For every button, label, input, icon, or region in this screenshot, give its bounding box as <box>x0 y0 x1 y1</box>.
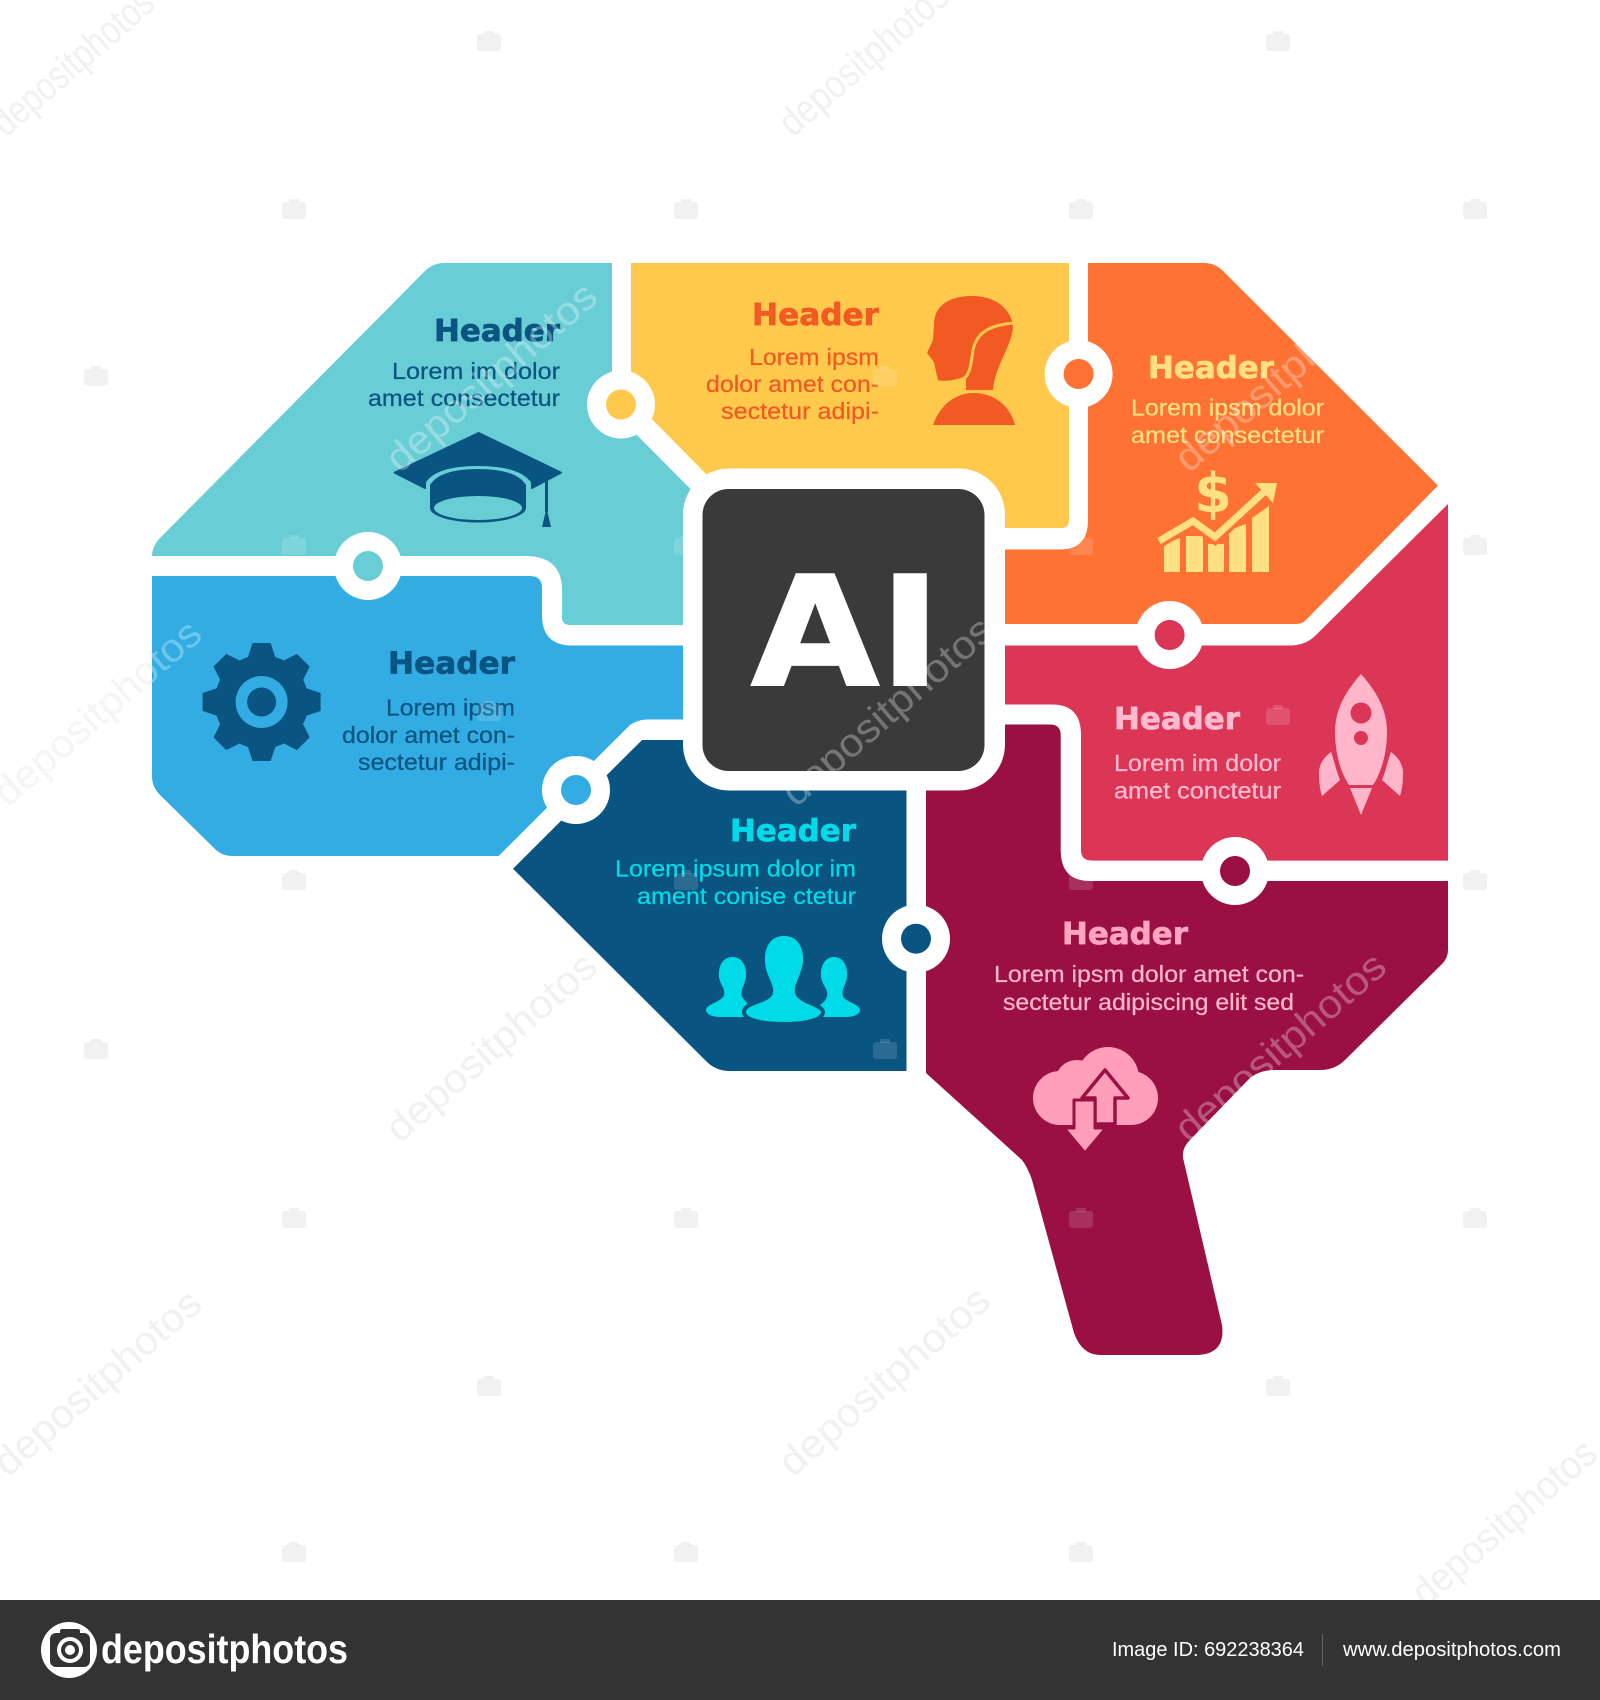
panel: maroon segment: Header <box>1062 917 1188 952</box>
faint camera marks over panels <box>282 366 1290 1228</box>
panel: orange segment: amet consectetur <box>1131 422 1324 448</box>
panel: orange segment <box>990 263 1438 624</box>
panel: yellow segment: sectetur adipi- <box>721 398 879 424</box>
icon: gear <box>203 643 321 761</box>
footer bar: www.depositphotos.com <box>1342 1639 1561 1661</box>
panel: blue segment: dolor amet con- <box>342 722 515 748</box>
central AI chip <box>683 468 1005 790</box>
icon: human head <box>927 296 1015 425</box>
panel: maroon segment: Lorem ipsm dolor amet con- <box>994 961 1304 987</box>
panel: orange segment: Header <box>1148 351 1274 386</box>
background watermarks: depositphotos <box>770 1278 999 1485</box>
panel: yellow segment <box>631 263 1069 528</box>
panel: crimson segment: amet conctetur <box>1114 778 1281 804</box>
foreground watermarks: depositphotos <box>773 608 1002 815</box>
panel: teal segment: Header <box>434 314 560 349</box>
panel: crimson segment: Lorem im dolor <box>1114 750 1281 776</box>
central AI chip: AI <box>751 544 941 721</box>
foreground watermarks: depositphotos <box>1166 944 1395 1151</box>
logo: camera badge <box>41 1622 97 1678</box>
panel: navy segment: Lorem ipsum dolor im <box>615 856 856 882</box>
panel: blue segment: Header <box>388 646 515 682</box>
panel: crimson segment <box>990 504 1448 861</box>
panel: maroon segment <box>926 724 1448 1355</box>
panel: crimson segment: Header <box>1114 702 1240 737</box>
panel: teal segment <box>152 263 700 625</box>
icon: cloud with arrows <box>1033 1047 1158 1153</box>
panel: teal segment: amet consectetur <box>368 385 560 411</box>
footer bar: Image ID: 692238364 <box>1112 1639 1304 1661</box>
icon: graduation cap <box>395 433 561 527</box>
icon: dollar growth chart <box>1159 462 1277 572</box>
background watermarks: depositphotos <box>377 944 606 1151</box>
footer bar <box>0 1600 1600 1700</box>
panel: blue segment <box>152 576 700 856</box>
panel: blue segment: Lorem ipsm <box>386 695 515 721</box>
panel: blue segment: sectetur adipi- <box>358 749 515 775</box>
icon: rocket <box>1319 674 1403 815</box>
panel: teal segment: Lorem im dolor <box>392 358 560 384</box>
panel: navy segment: Header <box>730 814 856 849</box>
icon: people group <box>706 934 860 1024</box>
panel: orange segment: Lorem ipsm dolor <box>1131 394 1324 420</box>
panel: navy segment: ament conise ctetur <box>637 883 856 909</box>
icon: dollar growth chart: $ <box>1194 462 1232 525</box>
panel: maroon segment: sectetur adipiscing elit sed <box>1003 989 1294 1015</box>
panel: yellow segment: Lorem ipsm <box>749 344 879 370</box>
panel: yellow segment: Header <box>752 298 879 333</box>
connector nodes <box>334 340 1269 973</box>
foreground watermarks <box>0 274 1395 1151</box>
panel: navy segment <box>513 740 906 1071</box>
panel: yellow segment: dolor amet con- <box>706 371 879 397</box>
footer bar: depositphotos <box>101 1626 348 1672</box>
foreground watermarks: depositphotos <box>1166 274 1395 481</box>
foreground watermarks: depositphotos <box>377 274 606 481</box>
